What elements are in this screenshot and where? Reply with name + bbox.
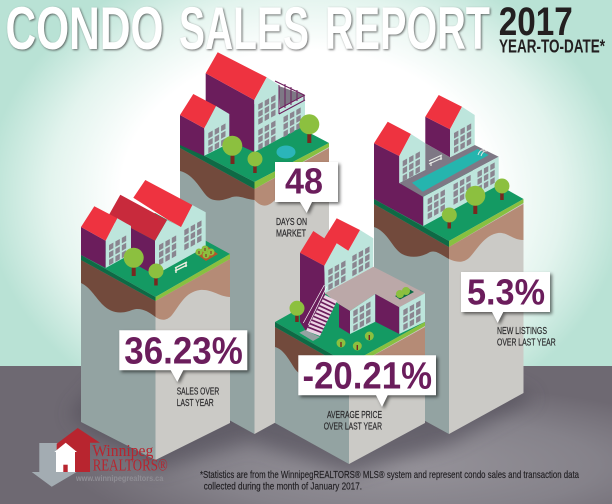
footnote: collected during the month of January 2017. <box>204 481 362 493</box>
icon: staircase <box>303 285 337 336</box>
background sky <box>0 0 612 367</box>
panel: days on market column <box>180 52 329 434</box>
icon: red house <box>57 428 100 472</box>
icon: bench <box>429 155 442 166</box>
callout: 48 days on market: MARKET <box>276 228 306 240</box>
icon: trees <box>442 178 510 228</box>
callout: 36.23% sales: SALES OVER <box>177 386 219 398</box>
panel: new listings column <box>374 95 524 434</box>
icon: door <box>63 465 68 472</box>
callout: 36.23% sales: 36.23% <box>124 331 243 373</box>
callout: 5.3% new listings: 5.3% <box>467 271 545 312</box>
logo: Winnipeg Realtors <box>32 428 168 487</box>
callout: 5.3% new listings: OVER LAST YEAR <box>497 337 556 349</box>
logo text: Winnipeg <box>92 441 154 460</box>
building: pool condo <box>374 95 499 226</box>
icon: grey arrow <box>32 443 77 487</box>
panel: sales column <box>81 180 230 460</box>
callout: 36.23% sales <box>119 330 247 409</box>
callout: -20.21% average price <box>298 355 436 432</box>
icon: garden bed <box>195 246 218 261</box>
callout: 36.23% sales: LAST YEAR <box>177 397 214 409</box>
callout: -20.21% average price: -20.21% <box>302 356 432 398</box>
background floor <box>0 366 612 504</box>
building: small house <box>180 94 229 156</box>
column shadow <box>70 380 535 474</box>
callout: 5.3% new listings: NEW LISTINGS <box>497 325 547 337</box>
icon: pool <box>412 149 489 192</box>
callout: -20.21% average price: AVERAGE PRICE <box>327 409 382 421</box>
panel: average price column <box>275 218 425 464</box>
building: tall condo <box>206 52 305 152</box>
footnote <box>200 469 579 493</box>
building: row houses <box>81 180 206 275</box>
icon: pond <box>276 146 296 158</box>
callout: 48 days on market: DAYS ON <box>276 216 307 228</box>
title <box>6 0 490 62</box>
building: terrace condo <box>299 218 425 341</box>
logo text <box>92 441 168 474</box>
callout: -20.21% average price: OVER LAST YEAR <box>324 420 382 432</box>
callout: 5.3% new listings <box>461 271 556 349</box>
icon: shrubs <box>336 332 374 350</box>
logo text: REALTORS® <box>93 455 168 474</box>
icon: trees <box>124 248 164 286</box>
subtitle: year: 2017 <box>499 0 573 44</box>
callout: 48 days on market <box>275 160 338 240</box>
logo: Winnipeg Realtors: www.winnipegrealtors.ca <box>75 473 164 483</box>
icon: white house <box>54 443 77 472</box>
icon: tree <box>290 301 304 322</box>
icon: pool ladder <box>478 150 487 156</box>
icon: rooftop planter <box>395 287 414 300</box>
icon: bench <box>175 262 187 273</box>
icon: trees <box>222 114 319 173</box>
callout: 48 days on market: 48 <box>285 160 323 202</box>
